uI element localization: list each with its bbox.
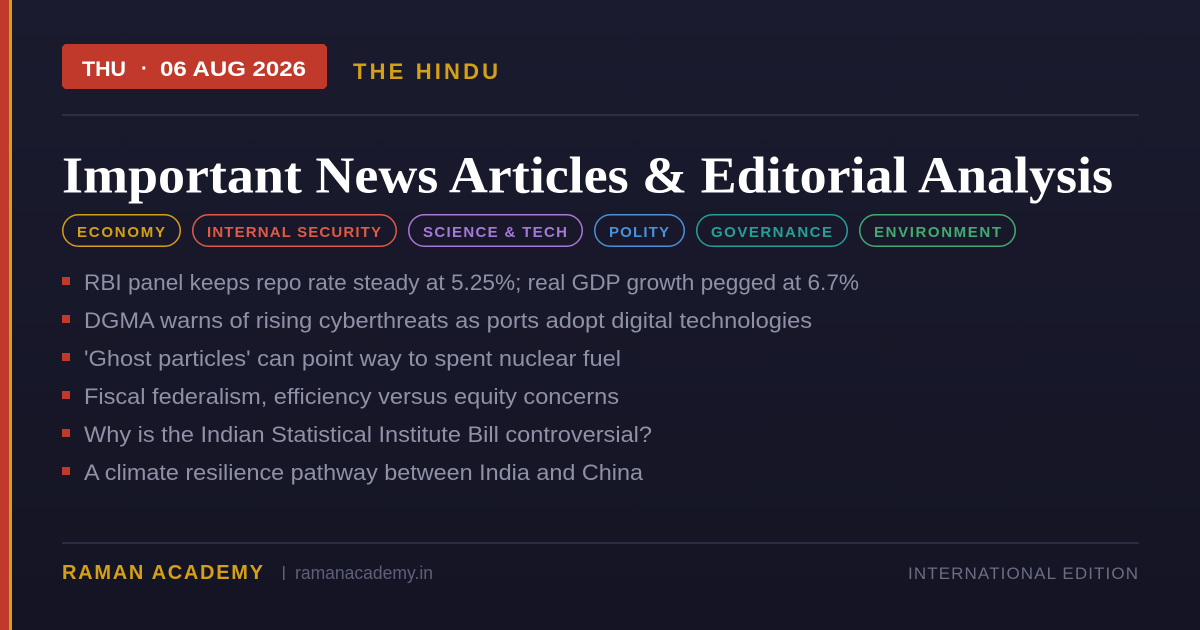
tag: environment: ENVIRONMENT: [874, 224, 1001, 241]
tag: economy: ECONOMY: [77, 224, 165, 241]
date badge: ·: [141, 58, 148, 80]
tag: internal security: INTERNAL SECURITY: [207, 224, 381, 241]
tag: polity: POLITY: [609, 224, 669, 241]
left accent stripe: [0, 0, 12, 630]
headline 6: A climate resilience pathway between India and China: [84, 460, 644, 485]
tag: science and tech: SCIENCE & TECH: [423, 224, 567, 241]
tag: internal security: [193, 215, 396, 246]
footer brand: RAMAN ACADEMY: [62, 562, 264, 584]
tag: science and tech: [409, 215, 582, 246]
tag: polity: [595, 215, 684, 246]
tag: governance: [697, 215, 847, 246]
headline 2: DGMA warns of rising cyberthreats as ports adopt digital technologies: [84, 308, 812, 333]
date badge: [62, 44, 327, 89]
headline 3: 'Ghost particles' can point way to spent nuclear fuel: [84, 346, 621, 371]
headline list: [62, 270, 859, 485]
source label: THE HINDU: [353, 59, 498, 84]
tag: economy: [63, 215, 180, 246]
headline 4: Fiscal federalism, efficiency versus equity concerns: [84, 384, 619, 409]
edition label: INTERNATIONAL EDITION: [908, 564, 1138, 583]
title: Important News Articles & Editorial Analysis: [62, 148, 1113, 204]
headline 1: RBI panel keeps repo rate steady at 5.25%; real GDP growth pegged at 6.7%: [84, 270, 859, 295]
topic tags: [63, 215, 1015, 246]
date badge: 06 AUG 2026: [160, 58, 306, 81]
date badge: THU: [82, 58, 126, 81]
headline 5: Why is the Indian Statistical Institute Bill controversial?: [84, 422, 652, 447]
tag: governance: GOVERNANCE: [711, 224, 832, 241]
tag: environment: [860, 215, 1015, 246]
footer website: ramanacademy.in: [295, 563, 433, 583]
